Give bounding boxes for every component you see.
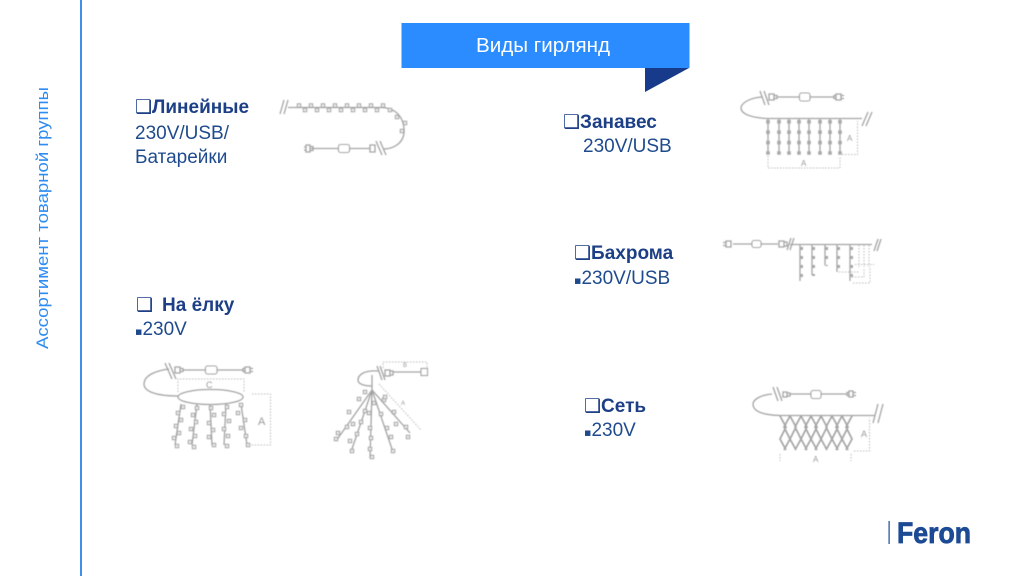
text block: curtain	[563, 111, 672, 157]
diagram: tree garland cone: A	[401, 401, 405, 407]
diagram: tree garland with ring: C	[206, 380, 213, 390]
text block: tree	[135, 294, 235, 340]
diagram: tree garland cone: B	[403, 363, 407, 369]
diagram: tree garland cone	[334, 362, 428, 459]
diagram: curtain garland	[741, 91, 872, 168]
diagram: tree garland with ring: A	[258, 416, 266, 428]
sidebar vertical label: Ассортимент товарной группы	[33, 87, 52, 349]
text block: tree: ❑	[136, 294, 153, 316]
text block: net: ❑Сеть	[584, 395, 646, 417]
text block: fringe: ❑Бахрома	[574, 242, 674, 264]
title banner: Виды гирлянд	[476, 35, 610, 57]
text block: tree: ▪230V	[135, 319, 187, 340]
diagram: net garland	[753, 387, 883, 464]
text block: curtain: ❑Занавес	[563, 111, 657, 133]
text block: fringe: ▪230V/USB	[574, 268, 670, 289]
text block: linear	[135, 96, 249, 168]
text block: net	[584, 395, 646, 441]
diagram: linear garland	[280, 100, 407, 155]
diagram: curtain garland: A	[801, 159, 807, 168]
diagram: curtain garland: A	[847, 134, 853, 143]
diagram: net garland: A	[813, 455, 819, 464]
logo: Feron: Feron	[897, 517, 971, 550]
text block: tree: На ёлку	[162, 295, 235, 316]
text block: fringe	[574, 242, 674, 289]
text block: linear: ❑Линейные	[135, 96, 249, 118]
diagram: net garland: A	[861, 429, 867, 439]
text block: curtain: 230V/USB	[583, 136, 672, 157]
text block: linear: 230V/USB/	[135, 123, 230, 144]
text block: net: ▪230V	[584, 420, 636, 441]
text block: linear: Батарейки	[135, 147, 227, 168]
diagram: fringe garland	[723, 238, 881, 283]
sidebar divider line	[80, 0, 82, 576]
diagram: tree garland with ring	[144, 363, 270, 449]
title banner	[402, 23, 690, 92]
